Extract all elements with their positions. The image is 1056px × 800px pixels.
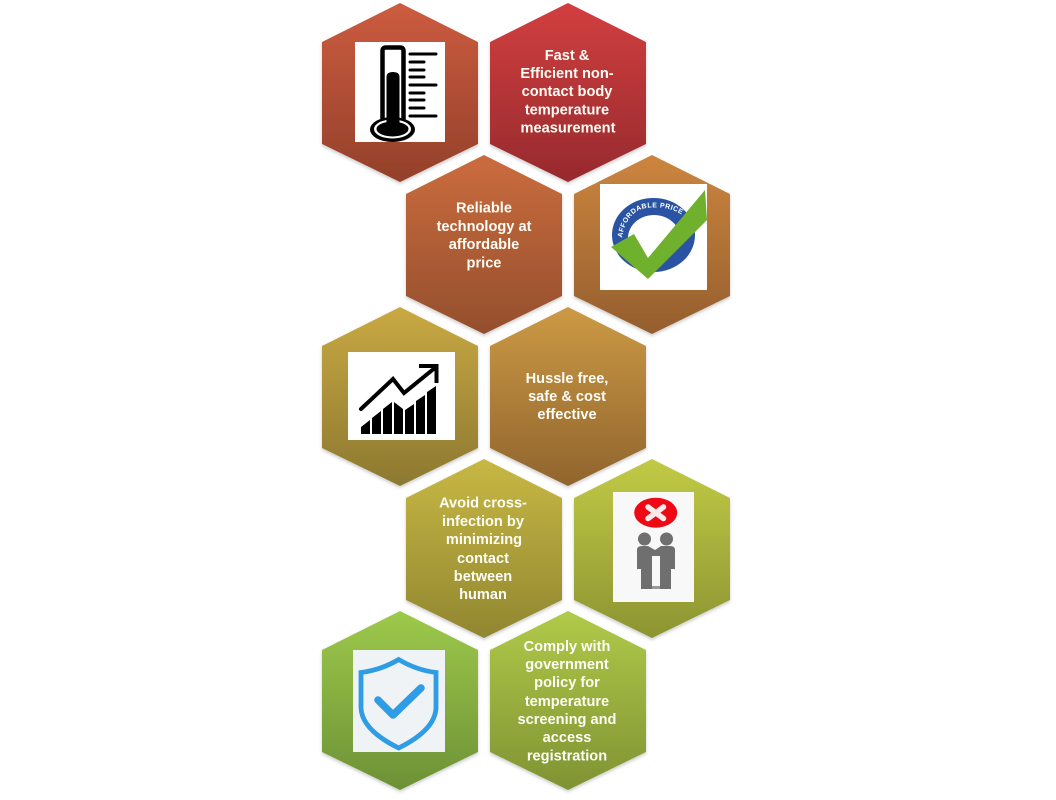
icon: no contact between people <box>613 492 694 602</box>
panel: shield icon hexagon <box>322 611 478 790</box>
text: hussle free: effective <box>537 407 597 423</box>
text: avoid cross-infection: between <box>454 569 512 585</box>
panel: hussle free <box>490 307 646 486</box>
panel: avoid cross-infection <box>406 459 562 638</box>
panel: comply with government policy <box>490 611 646 790</box>
text: fast and efficient: Fast & <box>545 48 590 64</box>
panel: affordable price icon hexagon <box>572 155 732 337</box>
text: comply with government policy: access <box>543 730 591 746</box>
text: fast and efficient: temperature <box>525 103 609 119</box>
text: comply with government policy: registration <box>527 749 607 765</box>
icon: rising bar chart <box>348 352 455 440</box>
text: comply with government policy: Comply with <box>524 639 610 655</box>
icon: shield with check <box>353 650 445 752</box>
text: avoid cross-infection: minimizing <box>446 532 522 548</box>
text: reliable technology: technology at <box>437 219 532 235</box>
text: fast and efficient: Efficient non- <box>520 66 614 82</box>
text: reliable technology: affordable <box>449 237 519 253</box>
text: avoid cross-infection: contact <box>457 551 509 567</box>
panel: thermometer icon hexagon <box>322 3 478 182</box>
text: comply with government policy: policy for <box>534 675 600 691</box>
panel: growth chart icon hexagon <box>322 307 478 486</box>
text: fast and efficient: contact body <box>522 84 613 100</box>
text: avoid cross-infection: infection by <box>442 514 525 530</box>
text: comply with government policy: screening and <box>518 712 616 728</box>
panel: no handshake icon hexagon <box>574 459 730 638</box>
icon: affordable price check badge: AFFORDABLE PRICE <box>618 202 684 238</box>
icon: affordable price check badge <box>600 184 707 290</box>
text: fast and efficient: measurement <box>521 121 616 137</box>
text: reliable technology: price <box>467 256 501 272</box>
text: avoid cross-infection: human <box>459 587 507 603</box>
icon: thermometer <box>355 42 445 142</box>
panel: reliable technology <box>406 155 562 334</box>
text: comply with government policy: temperature <box>525 694 609 710</box>
text: hussle free: safe & cost <box>528 389 606 405</box>
text: comply with government policy: government <box>525 657 609 673</box>
text: hussle free: Hussle free, <box>526 371 608 387</box>
text: reliable technology: Reliable <box>456 201 512 217</box>
panel: fast and efficient <box>490 3 646 182</box>
text: avoid cross-infection: Avoid cross- <box>439 496 527 512</box>
